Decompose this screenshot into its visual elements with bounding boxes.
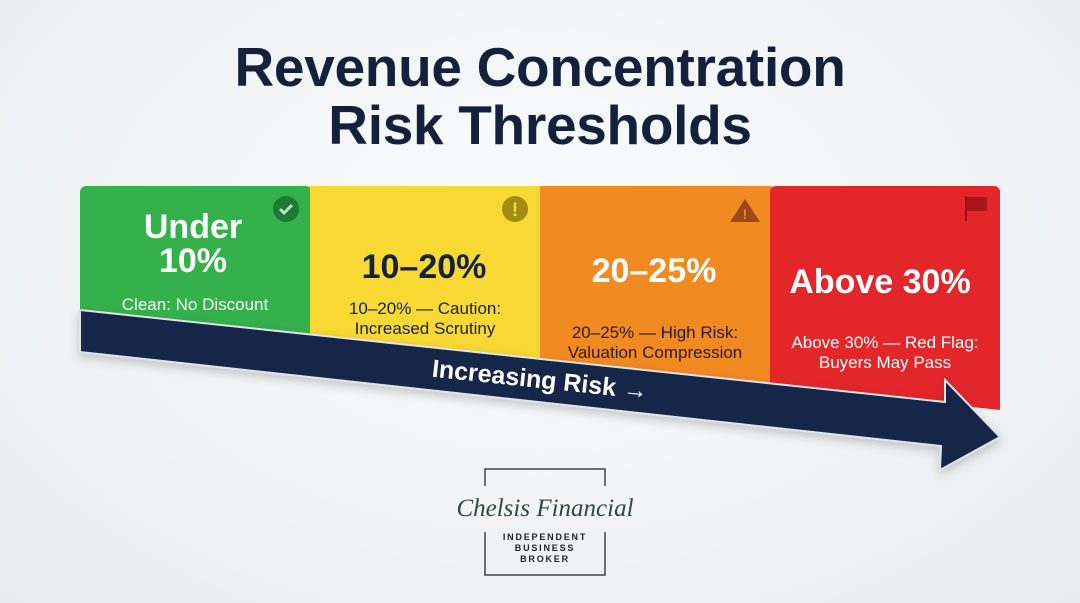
panel: under 10% xyxy=(80,186,310,334)
panel: under 10%: Clean: No Discount xyxy=(122,295,269,314)
panel: 20-25%: 20–25% — High Risk: xyxy=(572,323,738,342)
panel: 20-25%: Valuation Compression xyxy=(568,343,742,362)
title xyxy=(234,36,846,156)
risk scale chart xyxy=(74,186,1002,477)
panel: 10-20%: Increased Scrutiny xyxy=(355,319,496,338)
panel: 20-25% xyxy=(540,186,772,382)
logo xyxy=(456,468,634,576)
arrow: increasing risk xyxy=(80,310,1000,470)
arrow: increasing risk: Increasing Risk → xyxy=(431,355,649,405)
icon: exclamation xyxy=(502,196,528,222)
icon: check xyxy=(273,196,299,222)
logo: BUSINESS xyxy=(515,543,575,553)
logo: INDEPENDENT xyxy=(503,532,587,542)
panel: 10-20%: 10–20% — Caution: xyxy=(349,299,501,318)
panel: above 30%: Buyers May Pass xyxy=(819,353,951,372)
icon: warning xyxy=(730,199,760,222)
panel: under 10%: Under xyxy=(144,208,242,246)
icon: warning: ! xyxy=(743,206,747,222)
panel: 10-20% xyxy=(310,186,540,358)
icon: exclamation: ! xyxy=(512,200,518,221)
panel: 10-20%: 10–20% xyxy=(362,248,486,286)
title: Revenue Concentration xyxy=(234,36,846,98)
title: Risk Thresholds xyxy=(328,94,752,156)
logo: Chelsis Financial xyxy=(456,495,634,522)
logo: BROKER xyxy=(520,554,570,564)
panel: above 30%: Above 30% xyxy=(789,263,971,301)
panel: 20-25%: 20–25% xyxy=(592,252,716,290)
panels xyxy=(80,186,1000,416)
panel: under 10%: 10% xyxy=(159,242,227,280)
panel: above 30% xyxy=(770,186,1000,416)
panel: above 30%: Above 30% — Red Flag: xyxy=(791,333,979,352)
icon: flag xyxy=(965,196,987,221)
